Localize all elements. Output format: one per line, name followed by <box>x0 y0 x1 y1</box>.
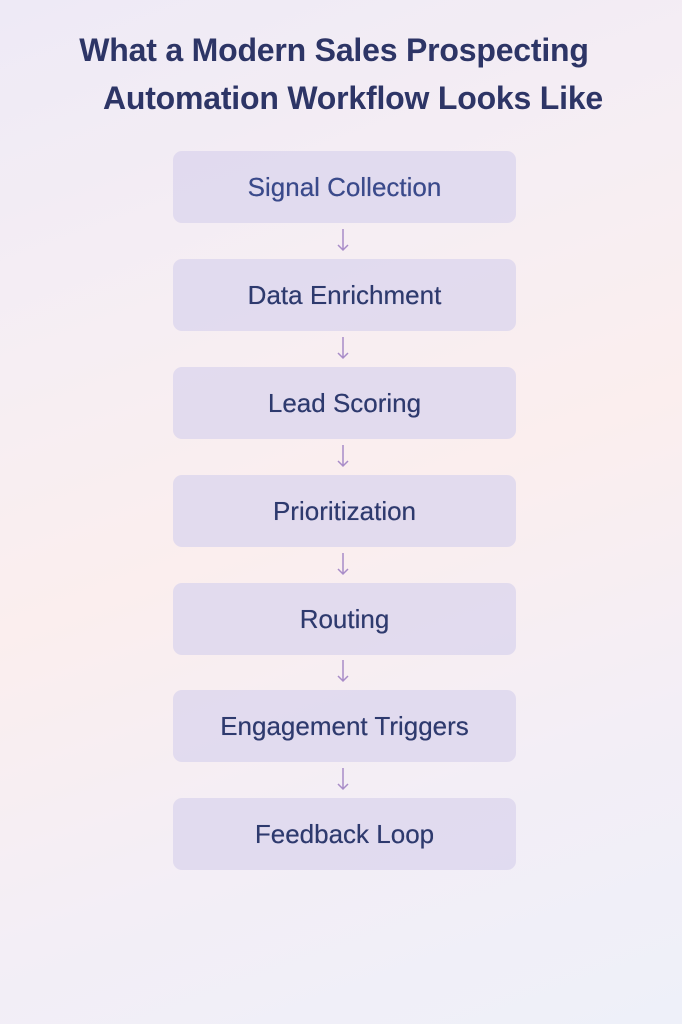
step: Data Enrichment: Data Enrichment <box>248 280 441 310</box>
step: Feedback Loop: Feedback Loop <box>255 818 434 848</box>
arrow <box>338 660 348 682</box>
arrow <box>338 229 348 251</box>
arrow <box>338 445 348 467</box>
step: Signal Collection <box>173 151 516 223</box>
title: Automation Workflow Looks Like <box>103 80 603 116</box>
arrow <box>338 553 348 575</box>
step: Signal Collection: Signal Collection <box>248 172 441 202</box>
step: Prioritization <box>173 475 516 547</box>
step: Prioritization: Prioritization <box>273 496 416 526</box>
title: What a Modern Sales Prospecting <box>79 32 589 68</box>
arrow <box>338 337 348 359</box>
step: Engagement Triggers: Engagement Triggers <box>220 710 469 740</box>
step: Lead Scoring <box>173 367 516 439</box>
arrow <box>338 768 348 790</box>
step: Lead Scoring: Lead Scoring <box>268 388 421 418</box>
step: Routing: Routing <box>300 604 389 634</box>
step: Feedback Loop <box>173 798 516 870</box>
step: Engagement Triggers <box>173 690 516 762</box>
title <box>79 32 603 116</box>
step: Routing <box>173 583 516 655</box>
step: Data Enrichment <box>173 259 516 331</box>
